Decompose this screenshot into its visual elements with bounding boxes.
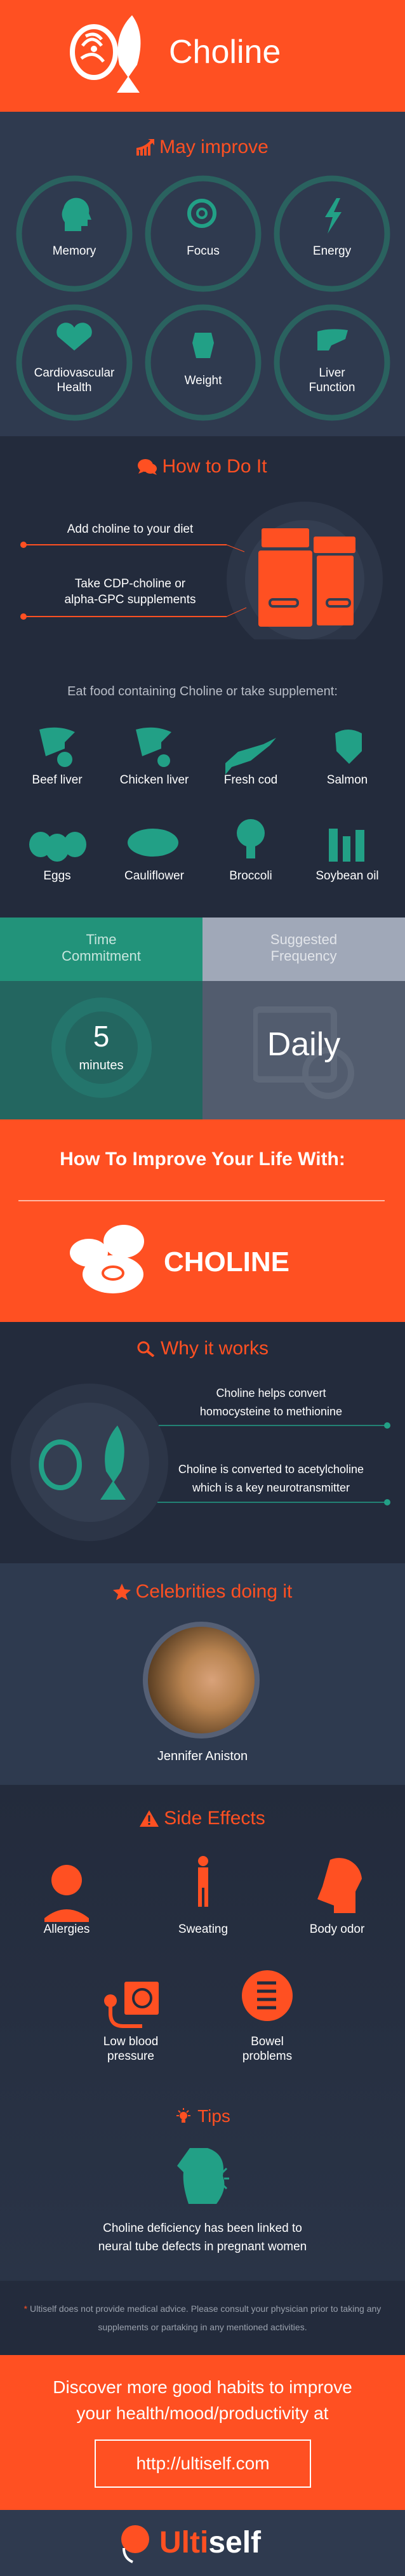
panel: side effects: Bowel bbox=[251, 2035, 284, 2048]
heading: How to Do It bbox=[162, 456, 267, 477]
tip text bbox=[98, 2222, 307, 2253]
panel: side effects: pressure bbox=[107, 2050, 154, 2063]
url button bbox=[95, 2439, 311, 2488]
banner heading: How To Improve Your Life With: bbox=[60, 1149, 345, 1170]
panel: side effects: Low blood bbox=[103, 2035, 158, 2048]
reason 1: homocysteine to methionine bbox=[200, 1405, 342, 1418]
food labels: Beef liver bbox=[32, 773, 83, 787]
step: supplements: alpha-GPC supplements bbox=[65, 593, 196, 606]
icon: pregnant bbox=[177, 2148, 229, 2204]
name: Jennifer Aniston bbox=[157, 1749, 248, 1763]
reason 2: which is a key neurotransmitter bbox=[192, 1481, 350, 1494]
banner title: CHOLINE bbox=[164, 1246, 289, 1278]
panel: may improve: Health bbox=[57, 381, 91, 394]
calendar icon bbox=[253, 1006, 354, 1099]
panel: how to do it: Chicken liver bbox=[120, 773, 189, 787]
reason 2: Choline is converted to acetylcholine bbox=[178, 1463, 364, 1476]
logo bbox=[121, 2525, 262, 2563]
labels: Memory bbox=[53, 244, 96, 258]
heading: Side Effects bbox=[164, 1808, 265, 1829]
step: supplements: Take CDP-choline or bbox=[75, 577, 185, 591]
clock icon bbox=[51, 998, 152, 1098]
panel: side effects bbox=[0, 1785, 405, 2281]
reason 1: Choline helps convert bbox=[216, 1387, 326, 1399]
cta text: your health/mood/productivity at bbox=[77, 2403, 328, 2423]
step: supplements bbox=[65, 577, 196, 606]
icon: salmon and fish bbox=[70, 15, 141, 93]
header: Commitment bbox=[62, 948, 141, 964]
heading: Celebrities doing it bbox=[136, 1581, 292, 1602]
header bbox=[0, 0, 405, 112]
banner: how to improve bbox=[0, 1119, 405, 1322]
url button: http://ultiself.com bbox=[136, 2453, 270, 2473]
header bbox=[0, 918, 202, 981]
panel: side effects: problems bbox=[242, 2050, 292, 2063]
disclaimer: * Ultiself does not provide medical advice. Please consult your physician prior to taking any supplements or partaking in any mentioned activities. bbox=[24, 2304, 381, 2332]
reason 2 bbox=[178, 1463, 364, 1494]
panel: may improve: Cardiovascular bbox=[34, 366, 114, 380]
labels: Allergies bbox=[44, 1923, 90, 1936]
panel: how to do it: Soybean oil bbox=[315, 869, 379, 883]
photo bbox=[143, 1622, 260, 1738]
panel: why it works bbox=[0, 1322, 405, 1563]
tip text: Choline deficiency has been linked to bbox=[103, 2222, 302, 2235]
panel: how to do it: Eggs bbox=[43, 869, 71, 883]
panel: celebrities bbox=[0, 1563, 405, 1785]
panel: how to do it bbox=[0, 436, 405, 918]
side effect icons bbox=[44, 1856, 362, 2028]
panel: how to do it: Cauliflower bbox=[124, 869, 184, 883]
panel: may improve: Function bbox=[309, 381, 355, 394]
reason 1 bbox=[200, 1387, 342, 1418]
supplement illustration bbox=[20, 502, 383, 639]
panel: may improve bbox=[0, 112, 405, 436]
panel: may improve: Focus bbox=[187, 244, 220, 258]
illustration bbox=[11, 1384, 390, 1541]
logo: Ultiself bbox=[159, 2526, 261, 2559]
step: add choline: Add choline to your diet bbox=[67, 523, 193, 536]
header bbox=[202, 918, 405, 981]
panel: side effects: Body odor bbox=[310, 1923, 364, 1936]
food icons bbox=[29, 728, 364, 862]
value: 5 bbox=[93, 1020, 109, 1053]
header: Time bbox=[86, 931, 117, 947]
heading: tips bbox=[176, 2106, 230, 2126]
panel: time commitment bbox=[0, 918, 202, 1119]
cta text: Discover more good habits to improve bbox=[53, 2377, 352, 2397]
panel: time commitment: minutes bbox=[79, 1058, 124, 1072]
call to action bbox=[0, 2355, 405, 2510]
panel: how to do it: Fresh cod bbox=[224, 773, 277, 787]
title: Choline bbox=[169, 34, 281, 70]
panel: may improve: Liver bbox=[319, 366, 345, 380]
panel: may improve: Weight bbox=[185, 374, 222, 387]
food intro text: Eat food containing Choline or take supplement: bbox=[67, 684, 338, 698]
header: Suggested bbox=[270, 931, 337, 947]
benefit circles bbox=[17, 175, 390, 420]
value: Daily bbox=[267, 1026, 340, 1063]
heading: Why it works bbox=[161, 1338, 269, 1359]
panel: may improve: Energy bbox=[313, 244, 351, 258]
panel: suggested frequency bbox=[202, 918, 405, 1119]
icon: eggs bbox=[70, 1225, 144, 1293]
tip text: neural tube defects in pregnant women bbox=[98, 2240, 307, 2253]
heading: tips: Tips bbox=[197, 2106, 230, 2126]
panel: side effects: Sweating bbox=[178, 1923, 228, 1936]
footer bbox=[0, 2510, 405, 2576]
panel: how to do it: Salmon bbox=[327, 773, 368, 787]
header: Frequency bbox=[271, 948, 336, 964]
heading: may improve: May improve bbox=[159, 137, 269, 157]
panel: how to do it: Broccoli bbox=[229, 869, 272, 883]
cta text bbox=[53, 2377, 352, 2423]
